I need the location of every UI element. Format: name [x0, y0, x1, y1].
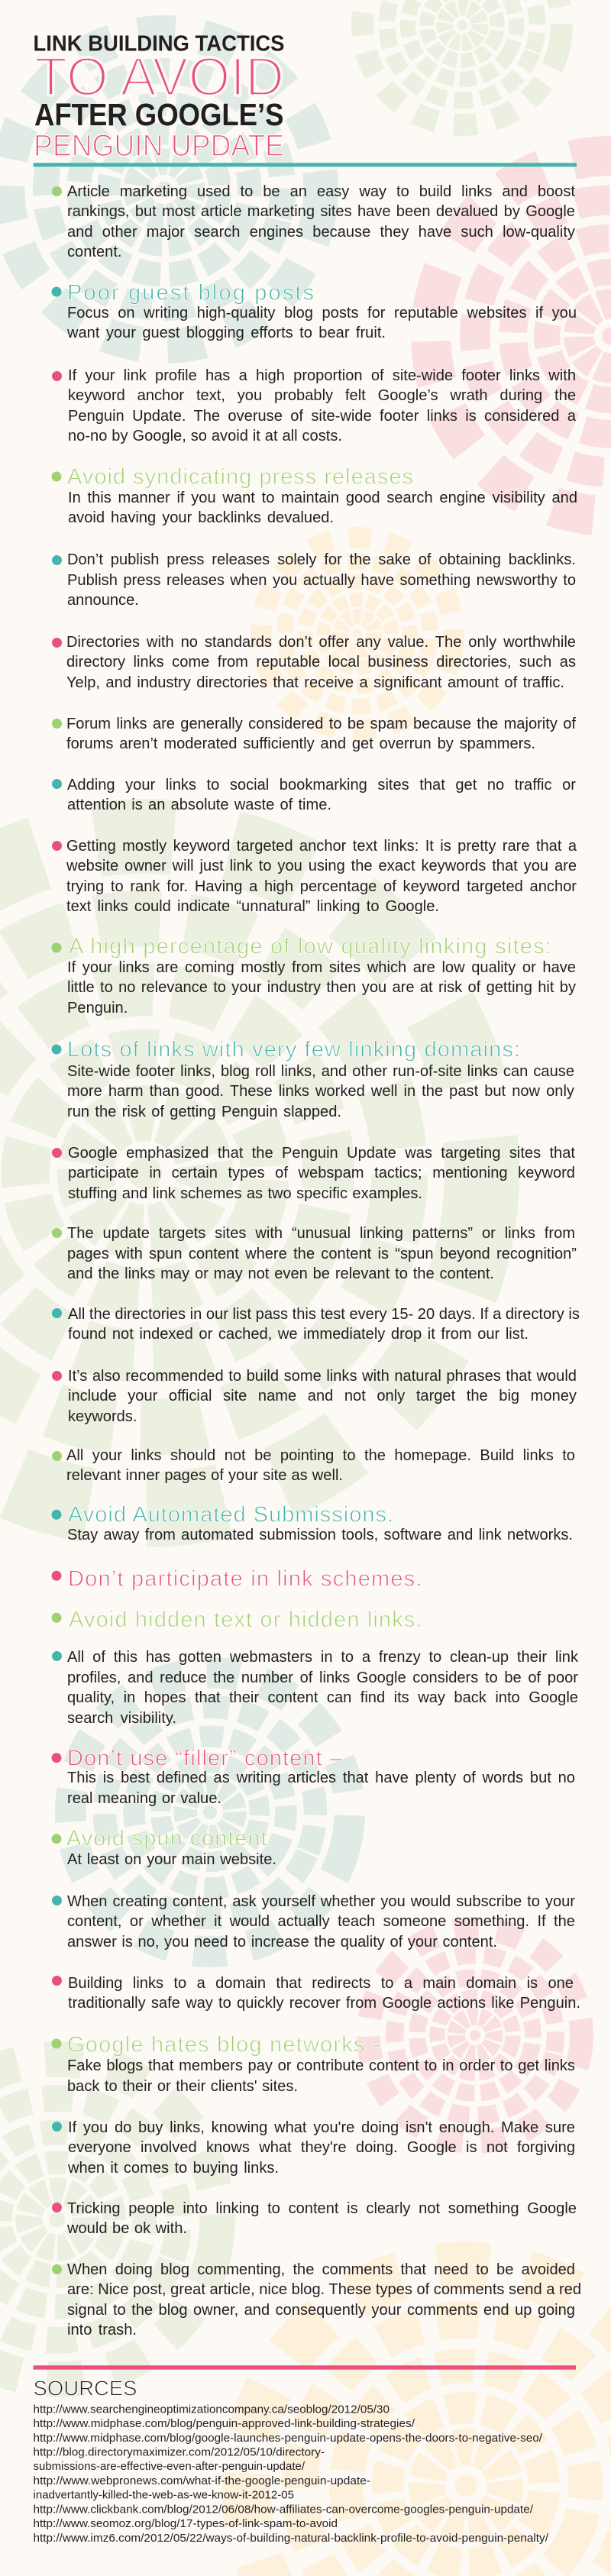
title: TO AVOID	[34, 47, 284, 108]
text block: social bookmarking: attention is an absolute waste of time.	[67, 796, 331, 813]
flower: green top right	[344, 0, 580, 144]
text block: article marketing: content.	[67, 243, 121, 260]
text block: redirects	[52, 1974, 580, 2012]
heading: Poor guest blog posts: Poor guest blog posts	[67, 281, 314, 305]
text block: low quality sites	[67, 958, 576, 1017]
text block: article marketing: and other major search engines because they have such low-quality	[67, 223, 575, 241]
heading: Avoid Automated Submissions: Avoid Automated Submissions.	[68, 1503, 393, 1527]
text block: syndicating press releases: In this manner if you want to maintain good search engine visibility and	[68, 489, 577, 506]
text block: update targets	[52, 1224, 577, 1282]
text block: social bookmarking	[52, 776, 576, 813]
text block: subscribe to your content: content, or whether it would actually teach someone something. If the	[67, 1912, 575, 1930]
text block: webmasters frenzy: quality, in hopes that their content can find its way back into Google	[67, 1689, 578, 1706]
text block: article marketing	[52, 183, 575, 260]
sources list: submissions-are-effective-even-after-penguin-update/	[34, 2460, 306, 2473]
text block: natural phrases: include your official site name and not only target the big money	[68, 1387, 577, 1404]
text block: guest posts	[67, 304, 577, 341]
text block: blog networks: back to their or their clients' sites.	[67, 2077, 298, 2095]
text block: footer links: no-no by Google, so avoid it at all costs.	[68, 427, 342, 444]
text block: anchor text: trying to rank for. Having a high percentage of keyword targeted anchor	[66, 878, 577, 895]
text block: tricking people	[52, 2199, 577, 2237]
heading: Don't participate in link schemes: Don’t participate in link schemes.	[68, 1567, 422, 1592]
text block: footer links: keyword anchor text, you probably felt Google’s wrath during the	[68, 386, 576, 404]
text block: low quality sites: Penguin.	[67, 999, 128, 1017]
flower: yellow bottom right	[0, 2215, 611, 2576]
text block: google emphasized	[52, 1144, 575, 1202]
flower: large green centre	[0, 798, 520, 1548]
text block: buying links	[52, 2119, 575, 2177]
text block: buying links: when it comes to buying links.	[68, 2159, 279, 2177]
text block: syndicating press releases: avoid having your backlinks devalued.	[68, 509, 334, 526]
text block: blog networks: Fake blogs that members pay or contribute content to in order to get links	[67, 2057, 575, 2074]
text block: blog networks	[67, 2057, 575, 2095]
text block: few domains	[67, 1062, 574, 1120]
text block: few domains: more harm than good. These links worked well in the past but now only	[67, 1082, 574, 1100]
text block: webmasters frenzy: profiles, and reduce the number of links Google considers to be of poor	[67, 1669, 578, 1686]
sources list: http://www.seomoz.org/blog/17-types-of-link-spam-to-avoid	[34, 2517, 338, 2530]
text block: blog commenting: signal to the blog owner, and consequently your comments end up going	[67, 2301, 575, 2319]
text block: natural phrases	[52, 1367, 577, 1425]
heading: Google hates blog networks: Google hates blog networks -	[67, 2033, 380, 2057]
text block: guest posts: Focus on writing high-quality blog posts for reputable websites if you	[67, 304, 577, 322]
flower: teal top left	[0, 17, 337, 362]
sources list: http://www.midphase.com/blog/penguin-approved-link-building-strategies/	[34, 2417, 415, 2430]
text block: footer links: Penguin Update. The overuse of site-wide footer links is considered a	[68, 407, 576, 425]
flower: pink upper right	[422, 147, 611, 525]
text block: webmasters frenzy: All of this has gotten webmasters in to a frenzy to clean-up their link	[67, 1648, 578, 1666]
heading: Avoid spun content: Avoid spun content	[66, 1827, 267, 1851]
text block: redirects: Building links to a domain that redirects to a main domain is one	[68, 1974, 574, 1992]
text block: homepage links: All your links should not be pointing to the homepage. Build links to	[66, 1446, 575, 1464]
text block: article marketing: Article marketing used to be an easy way to build links and boost	[67, 183, 575, 200]
text block: blog commenting	[52, 2261, 581, 2338]
text block: natural phrases: It’s also recommended to build some links with natural phrases that would	[68, 1367, 577, 1385]
text block: natural phrases: keywords.	[68, 1408, 137, 1425]
text block: guest posts: want your guest blogging efforts to bear fruit.	[67, 324, 386, 341]
text block: low quality sites: If your links are coming mostly from sites which are low quality or have	[67, 958, 576, 976]
text block: subscribe to your content: When creating content, ask yourself whether you would subscribe to your	[67, 1892, 575, 1910]
heading: Don't use filler content: Don’t use “filler” content –	[67, 1747, 343, 1771]
heading: A high percentage of low quality linking sites: A high percentage of low quality linking sites:	[69, 934, 551, 958]
text block: filler content: real meaning or value.	[67, 1789, 221, 1807]
text block: social bookmarking: Adding your links to social bookmarking sites that get no traffic or	[67, 776, 576, 793]
text block: forum links	[52, 715, 576, 752]
text block: filler content: This is best defined as writing articles that have plenty of words but no	[67, 1769, 575, 1786]
text block: directories test	[52, 1305, 580, 1343]
sources list: http://www.searchengineoptimizationcompany.ca/seoblog/2012/05/30	[34, 2403, 390, 2416]
text block: article marketing: rankings, but most article marketing sites have been devalued by Google	[67, 202, 575, 220]
sources list: http://www.imz6.com/2012/05/22/ways-of-building-natural-backlink-profile-to-avoid-penguin-penalty/	[34, 2532, 549, 2545]
heading: Lots of links with very few linking domains: Lots of links with very few linking domains:	[67, 1037, 520, 1062]
text block: automated submissions: Stay away from automated submission tools, software and link networks.	[67, 1526, 573, 1543]
text block: directories: Yelp, and industry directories that receive a significant amount of traffic.	[66, 674, 564, 691]
text block: anchor text: website owner will just link to you using the exact keywords that you are	[66, 857, 577, 874]
text block: directories test: All the directories in our list pass this test every 15- 20 days. If a directory is	[68, 1305, 580, 1323]
text block: few domains: run the risk of getting Penguin slapped.	[67, 1103, 341, 1120]
text block: subscribe to your content	[52, 1892, 575, 1951]
text block: homepage links	[52, 1446, 575, 1484]
sources list: http://www.webpronews.com/what-if-the-google-penguin-update-	[34, 2474, 370, 2487]
sources list: http://blog.directorymaximizer.com/2012/05/10/directory-	[34, 2445, 325, 2459]
flower: green bottom left	[0, 2031, 245, 2407]
text block: press releases	[52, 551, 576, 609]
sources list	[34, 2403, 549, 2545]
title: LINK BUILDING TACTICS	[34, 32, 284, 57]
sources heading: SOURCES	[34, 2377, 137, 2400]
text block: low quality sites: little to no relevance to your industry then you are at risk of getting hit by	[67, 978, 576, 996]
text block: google emphasized: participate in certain types of webspam tactics; mentioning keyword	[68, 1164, 575, 1181]
heading: Avoid hidden text or hidden links: Avoid hidden text or hidden links.	[69, 1608, 422, 1632]
title: AFTER GOOGLE’S	[34, 97, 284, 132]
text block: forum links: Forum links are generally considered to be spam because the majority of	[66, 715, 576, 732]
text block: google emphasized: stuffing and link schemes as two specific examples.	[68, 1185, 422, 1202]
text block: webmasters frenzy: search visibility.	[67, 1709, 176, 1727]
text block: redirects: traditionally safe way to quickly recover from Google actions like Penguin.	[68, 1994, 580, 2012]
text block: tricking people: would be ok with.	[67, 2219, 187, 2237]
text block: press releases: Don’t publish press releases solely for the sake of obtaining backlinks.	[67, 551, 576, 568]
text block: spun content: At least on your main website.	[67, 1850, 276, 1868]
flower: pink lower right	[361, 1921, 589, 2149]
text block: directories: Directories with no standards don’t offer any value. The only worthwhile	[66, 633, 576, 651]
text block: filler content	[67, 1769, 575, 1807]
text block: buying links: everyone involved knows what they're doing. Google is not forgiving	[68, 2138, 575, 2156]
text block: anchor text: Getting mostly keyword targeted anchor text links: It is pretty rare that a	[66, 837, 577, 855]
text block: anchor text: text links could indicate “unnatural” linking to Google.	[66, 897, 439, 915]
text block: press releases: Publish press releases when you actually have something newsworthy to	[67, 571, 576, 589]
text block: directories test: found not indexed or cached, we immediately drop it from our list.	[68, 1325, 529, 1343]
text block: blog commenting: into trash.	[67, 2321, 137, 2338]
text block: update targets: and the links may or may not even be relevant to the content.	[67, 1265, 494, 1282]
text block: directories	[52, 633, 576, 691]
text block: homepage links: relevant inner pages of your site as well.	[66, 1466, 343, 1484]
pink divider bar	[34, 2365, 576, 2370]
text block: press releases: announce.	[67, 591, 139, 609]
sources list: inadvertantly-killed-the-web-as-we-know-it-2012-05	[34, 2489, 294, 2502]
text block: tricking people: Tricking people into linking to content is clearly not something Google	[67, 2199, 577, 2217]
text block: blog commenting: When doing blog commenting, the comments that need to be avoided	[67, 2261, 575, 2278]
text block: syndicating press releases	[68, 489, 577, 526]
teal divider bar	[34, 163, 577, 166]
flower: yellow middle	[246, 522, 469, 745]
text block: anchor text	[52, 837, 577, 915]
text block: footer links	[52, 367, 576, 444]
sources list: http://www.midphase.com/blog/google-launches-penguin-update-opens-the-doors-to-negative-seo/	[34, 2432, 543, 2445]
text block: directories: directory links come from reputable local business directories, such as	[66, 653, 576, 671]
text block: update targets: The update targets sites with “unusual linking patterns” or links from	[67, 1224, 575, 1242]
text block: footer links: If your link profile has a high proportion of site-wide footer links with	[68, 367, 576, 384]
text block: google emphasized: Google emphasized that the Penguin Update was targeting sites that	[68, 1144, 575, 1162]
text block: buying links: If you do buy links, knowing what you're doing isn't enough. Make sure	[68, 2119, 575, 2136]
title	[34, 32, 284, 163]
title: PENGUIN UPDATE	[34, 129, 284, 163]
sources list: http://www.clickbank.com/blog/2012/06/08/how-affiliates-can-overcome-googles-penguin-update/	[34, 2503, 534, 2516]
flower: teal lower	[41, 1644, 379, 1981]
text block: subscribe to your content: answer is no, you need to increase the quality of your content.	[67, 1933, 497, 1951]
text block: blog commenting: are: Nice post, great article, nice blog. These types of comments send a red	[67, 2280, 581, 2298]
text block: webmasters frenzy	[52, 1648, 578, 1727]
heading: Avoid syndicating press releases: Avoid syndicating press releases	[67, 464, 413, 489]
text block: few domains: Site-wide footer links, blog roll links, and other run-of-site links can cause	[67, 1062, 574, 1080]
text block: forum links: forums aren’t moderated sufficiently and get overrun by spammers.	[66, 735, 535, 752]
text block: update targets: pages with spun content where the content is “spun beyond recognition”	[67, 1245, 577, 1262]
